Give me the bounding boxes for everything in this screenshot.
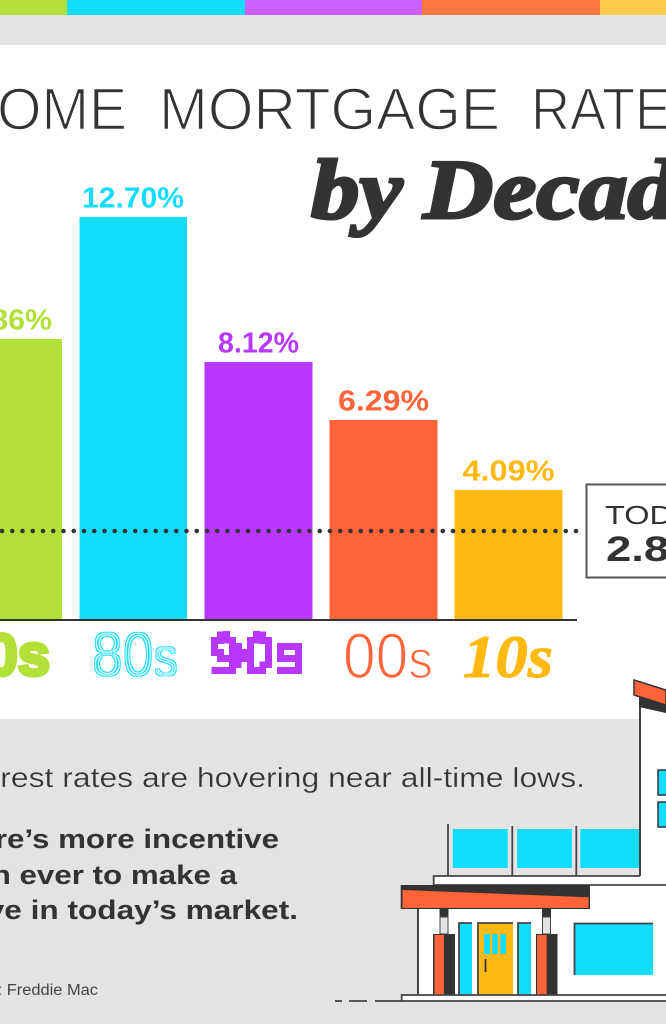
bar: 10s [454,456,562,619]
bar: 90s [204,328,312,619]
bold call to action [0,825,298,925]
today's rate dotted line [2,529,577,533]
decade label: 80s: 80s [92,620,178,690]
title: home mortgage rates [0,76,666,142]
bar: 00s [330,386,438,619]
title: home mortgage rates: MORTGAGE [159,76,500,142]
front door [478,923,513,995]
bottom grey panel [0,719,640,1024]
bar: 00s: 6.29% [338,386,429,418]
sidelights [459,923,531,995]
bar: 90s: 8.12% [218,328,299,360]
bar chart [0,182,577,620]
large window [574,923,653,975]
upper tower [634,680,666,885]
decade label: 90s: 90s [210,623,306,688]
bar: 80s [80,182,187,619]
ground floor wall [418,909,666,995]
decade label: 10s: 10s [463,624,553,690]
bar: 80s: 12.70% [82,182,184,214]
entry columns [433,909,558,995]
roof terrace [434,876,666,885]
bar: 70s [0,304,62,619]
rooftop windows [448,824,639,877]
today rate callout [586,484,666,578]
house illustration [335,680,666,1001]
foundation and ground line [335,995,666,1001]
bar: 10s: 4.09% [462,456,555,488]
top colour stripe [0,0,666,15]
decade label: 00s: 00s [343,620,433,692]
entry canopy [401,885,590,909]
top grey band [0,15,666,45]
chart axis [0,619,577,621]
